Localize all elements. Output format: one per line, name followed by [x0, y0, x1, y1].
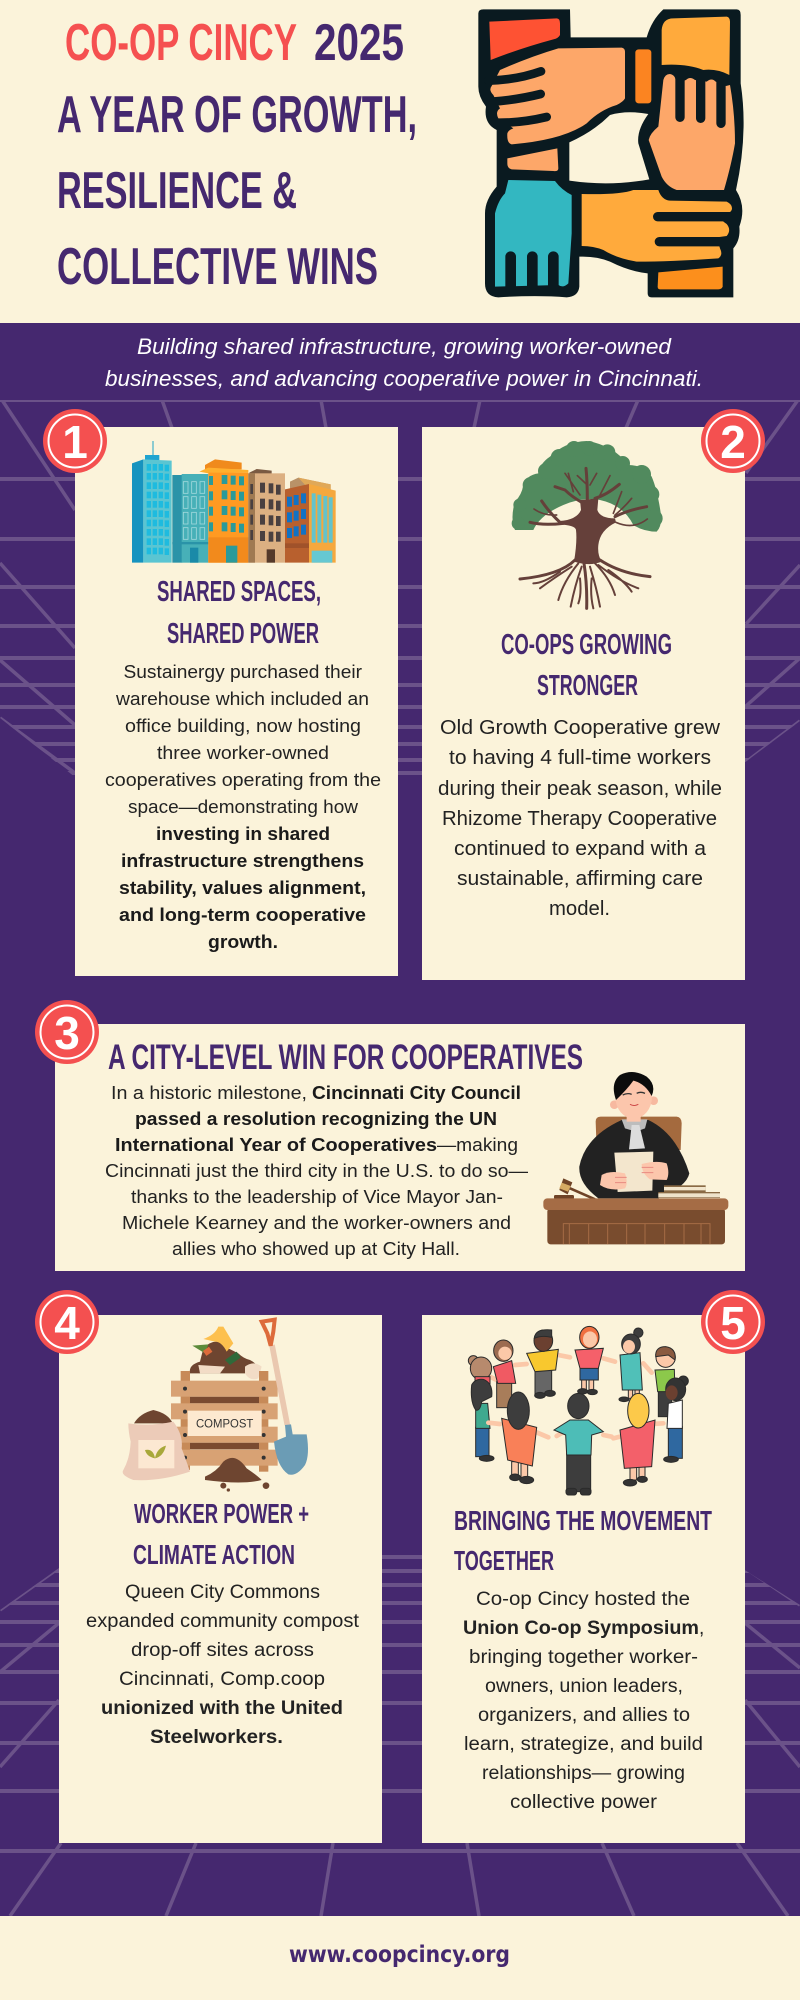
- title: RESILIENCE &: [57, 162, 297, 220]
- text: card 2 body: during their peak season, while: [438, 778, 722, 800]
- text: card 4 body: [86, 1582, 360, 1748]
- heading: bringing the movement together: [454, 1505, 712, 1576]
- heading: shared spaces shared power: [157, 576, 321, 650]
- text: card 5 body: ,: [699, 1618, 704, 1639]
- text: card 1 body: investing in shared: [156, 824, 330, 844]
- text: card 4 body: drop-off sites across: [131, 1640, 314, 1661]
- text: card 5 body: owners, union leaders,: [485, 1676, 683, 1697]
- title: CO-OP CINCY: [65, 14, 297, 72]
- subtitle: businesses, and advancing cooperative power in Cincinnati.: [105, 366, 703, 391]
- number badge 5: [701, 1290, 765, 1354]
- text: card 3 body: International Year of Cooperatives: [115, 1135, 437, 1155]
- text: card 5 body: collective power: [510, 1792, 658, 1813]
- footer website link text: www.coopcincy.org: [289, 1942, 510, 1968]
- number badge 1: 1: [62, 416, 88, 468]
- number badge 5: 5: [720, 1297, 746, 1349]
- icon: tree with roots: [512, 441, 663, 608]
- text: card 3 body: Michele Kearney and the worker-owners and: [122, 1213, 511, 1233]
- heading: co-ops growing stronger: [501, 629, 672, 702]
- heading: bringing the movement together: TOGETHER: [454, 1545, 554, 1576]
- text: card 1 body: stability, values alignment,: [119, 878, 366, 898]
- text: card 2 body: continued to expand with a: [454, 838, 707, 860]
- text: card 3 body: [105, 1083, 528, 1259]
- number badge 2: 2: [720, 416, 746, 468]
- text: card 1 body: infrastructure strengthens: [121, 851, 364, 871]
- icon: compost crate, sack and shovel: COMPOST: [196, 1417, 254, 1431]
- background perspective grid: ceiling: [0, 400, 800, 773]
- heading: co-ops growing stronger: STRONGER: [537, 670, 638, 702]
- subtitle: Building shared infrastructure, growing worker-owned: [137, 334, 672, 359]
- subtitle: [105, 334, 703, 391]
- heading: worker power: [133, 1498, 309, 1570]
- heading: shared spaces shared power: SHARED POWER: [167, 618, 319, 650]
- text: card 1 body: space—demonstrating how: [128, 797, 359, 817]
- text: card 2 body: to having 4 full-time workers: [449, 747, 711, 769]
- text: card 1 body: [105, 662, 381, 952]
- text: card 1 body: warehouse which included an: [115, 689, 369, 709]
- icon: people holding hands in a circle: [468, 1326, 688, 1495]
- text: card 3 body: allies who showed up at City Hall.: [172, 1239, 460, 1259]
- heading: co-ops growing stronger: CO-OPS GROWING: [501, 629, 672, 661]
- text: card 1 body: office building, now hosting: [125, 716, 361, 736]
- panel: card 2 co-ops growing stronger: [422, 427, 745, 980]
- text: card 2 body: sustainable, affirming care: [457, 868, 703, 890]
- text: card 5 body: [463, 1589, 704, 1813]
- title: [57, 14, 417, 296]
- icon: judge at desk: [543, 1072, 728, 1244]
- text: card 4 body: Queen City Commons: [125, 1582, 320, 1603]
- text: card 5 body: bringing together worker-: [469, 1647, 698, 1668]
- text: card 5 body: organizers, and allies to: [478, 1705, 690, 1726]
- panel: card 5 bringing the movement together: [422, 1315, 745, 1843]
- title: 2025: [314, 14, 404, 72]
- text: card 3 body: Cincinnati just the third city in the U.S. to do so—: [105, 1161, 528, 1181]
- text: card 4 body: Cincinnati, Comp.coop: [119, 1669, 325, 1690]
- heading: worker power: WORKER POWER +: [134, 1498, 309, 1529]
- text: card 1 body: cooperatives operating from the: [105, 770, 381, 790]
- text: card 5 body: Union Co-op Symposium: [463, 1618, 699, 1639]
- icon: compost crate, sack and shovel: [123, 1320, 308, 1492]
- text: card 3 body: In a historic milestone,: [111, 1083, 307, 1103]
- number badge 1: [43, 409, 107, 473]
- number badge 2: [701, 409, 765, 473]
- heading: worker power: CLIMATE ACTION: [133, 1539, 295, 1570]
- header band: [0, 0, 800, 323]
- footer band: [0, 1916, 800, 2000]
- panel: card 4 worker power and climate action: [59, 1315, 382, 1843]
- number badge 3: 3: [54, 1007, 80, 1059]
- text: card 3 body: passed a resolution recognizing the UN: [135, 1109, 497, 1129]
- text: card 1 body: and long-term cooperative: [119, 905, 366, 925]
- background perspective grid: floor: [0, 1557, 800, 1916]
- number badge 4: 4: [54, 1297, 80, 1349]
- number badge 4: [35, 1290, 99, 1354]
- text: card 4 body: expanded community compost: [86, 1611, 360, 1632]
- text: card 4 body: Steelworkers.: [150, 1727, 283, 1748]
- text: card 1 body: three worker-owned: [157, 743, 329, 763]
- title: A YEAR OF GROWTH,: [57, 86, 417, 144]
- number badge 3: [35, 1000, 99, 1064]
- text: card 2 body: model.: [549, 898, 610, 920]
- text: card 3 body: Cincinnati City Council: [312, 1083, 521, 1103]
- text: card 2 body: [438, 717, 722, 920]
- text: card 2 body: Rhizome Therapy Cooperative: [442, 808, 717, 830]
- heading: a city-level win: A CITY-LEVEL WIN FOR COOPERATIVES: [108, 1038, 583, 1077]
- text: card 2 body: Old Growth Cooperative grew: [440, 717, 721, 739]
- title: COLLECTIVE WINS: [57, 238, 378, 296]
- icon: four interlocking hands: [478, 9, 744, 297]
- text: card 5 body: Co-op Cincy hosted the: [476, 1589, 690, 1610]
- icon: city buildings: [132, 441, 336, 563]
- text: card 4 body: unionized with the United: [101, 1698, 343, 1719]
- text: card 1 body: growth.: [208, 932, 278, 952]
- text: card 3 body: —making: [437, 1135, 518, 1155]
- text: card 3 body: thanks to the leadership of Vice Mayor Jan-: [131, 1187, 503, 1207]
- panel: card 1 shared spaces: [75, 427, 398, 976]
- text: card 5 body: relationships— growing: [482, 1763, 685, 1784]
- heading: shared spaces shared power: SHARED SPACES,: [157, 576, 321, 608]
- text: card 1 body: Sustainergy purchased their: [124, 662, 362, 682]
- text: card 5 body: learn, strategize, and build: [464, 1734, 703, 1755]
- panel: card 3 city-level win: [55, 1024, 745, 1271]
- purple background: [0, 323, 800, 1916]
